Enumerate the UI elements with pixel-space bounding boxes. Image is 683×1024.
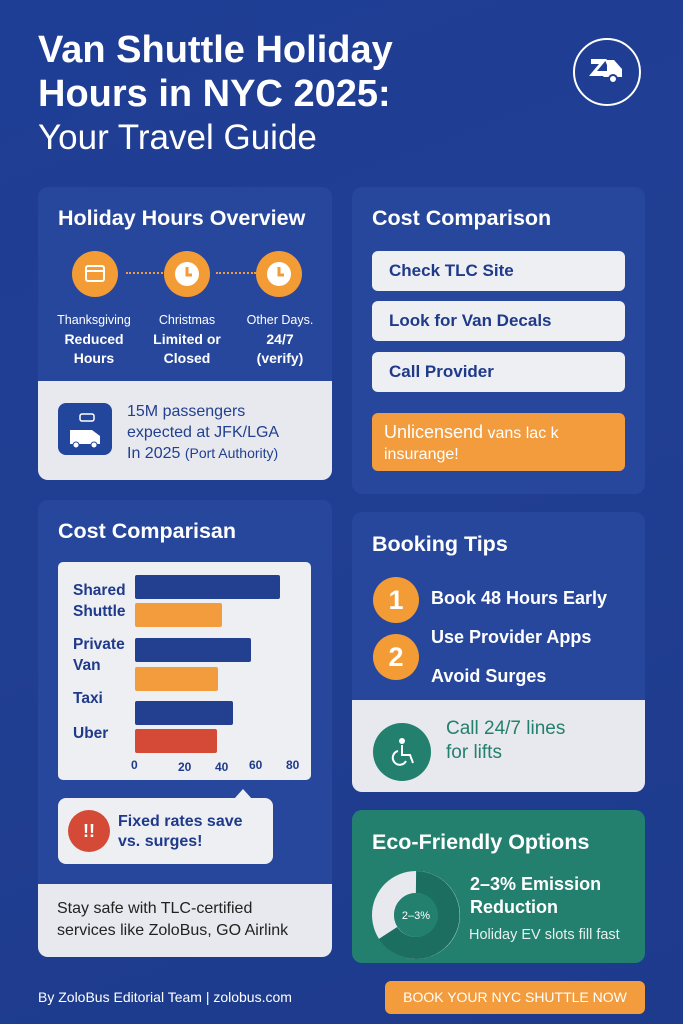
footer credit: By ZoloBus Editorial Team | zolobus.com: [38, 989, 292, 1005]
text: passengers: [127, 403, 279, 462]
bar chart: Private: [73, 636, 125, 653]
panel: cost comparison chart: [38, 500, 332, 957]
warning box: insurange!: [384, 446, 459, 463]
icon: van: [58, 403, 112, 455]
icon: logo: [573, 38, 641, 106]
panel: booking tips: [352, 512, 645, 792]
icon: number 2: [373, 634, 419, 680]
heading: Cost Comparisan: [58, 519, 236, 543]
callout: [58, 798, 273, 864]
callout: Fixed rates save: [118, 813, 243, 830]
stat text: 2–3% Emission: [470, 874, 601, 894]
label: thanksgiving: Hours: [74, 350, 114, 366]
label: other days: [247, 313, 313, 366]
panel: cost comparison checklist: [352, 187, 645, 494]
bar chart: Van: [73, 657, 101, 674]
bar chart: Taxi: [73, 690, 103, 707]
callout: vs. surges!: [118, 833, 202, 850]
button: book now: [385, 981, 645, 1014]
icon: number 1: [373, 577, 419, 623]
bar chart: 60: [249, 758, 262, 772]
bar chart: Shared: [73, 582, 126, 599]
donut chart: 2–3%: [402, 910, 430, 922]
stat text: [470, 874, 601, 917]
label: other days: (verify): [257, 350, 303, 366]
label: christmas: Closed: [164, 350, 210, 366]
heading: Eco-Friendly Options: [372, 830, 589, 854]
button: van decals: Look for Van Decals: [389, 311, 552, 330]
stat text: Reduction: [470, 897, 558, 917]
tips list: Avoid Surges: [431, 666, 546, 686]
label: other days: 24/7: [266, 331, 294, 347]
safety note: services like ZoloBus, GO Airlink: [57, 922, 288, 939]
button: check TLC: Check TLC Site: [389, 261, 514, 280]
title: [38, 29, 393, 157]
accessibility box: Call 24/7 lines: [446, 718, 565, 739]
label: thanksgiving: [57, 313, 131, 366]
bar chart: Shuttle: [73, 603, 126, 620]
bar chart: 0: [131, 758, 138, 772]
accessibility box: for lifts: [446, 742, 502, 763]
bar chart: [58, 562, 311, 780]
button: van decals: [372, 301, 625, 341]
icon: alert: !!: [83, 821, 95, 841]
button: call provider: [372, 352, 625, 392]
icon: clock 2: [256, 251, 302, 297]
text: passengers: In 2025 (Port Authority): [127, 445, 278, 462]
button: check TLC: [372, 251, 625, 291]
safety note: Stay safe with TLC-certified: [57, 900, 252, 917]
label: christmas: Limited or: [153, 331, 221, 347]
tips list: [431, 588, 607, 686]
donut chart: [372, 871, 460, 959]
bar chart: 80: [286, 758, 299, 772]
icon: clock: [164, 251, 210, 297]
tips list: Book 48 Hours Early: [431, 588, 607, 608]
label: thanksgiving: Reduced: [64, 331, 124, 347]
bar chart: Uber: [73, 725, 108, 742]
panel: eco-friendly: Holiday EV slots fill fast: [469, 927, 620, 943]
text: passengers: 15M passengers: [127, 403, 245, 420]
heading: Holiday Hours Overview: [58, 206, 305, 230]
panel: eco-friendly: [352, 810, 645, 963]
label: christmas: [153, 313, 221, 366]
icon: alert: [68, 810, 110, 852]
button: call provider: Call Provider: [389, 362, 494, 381]
title: Van Shuttle Holiday: [38, 29, 393, 71]
bar chart: 20: [178, 760, 191, 774]
button: book now: BOOK YOUR NYC SHUTTLE NOW: [403, 989, 627, 1005]
warning box: [372, 413, 625, 471]
label: thanksgiving: Thanksgiving: [57, 313, 131, 327]
panel: holiday hours overview: [38, 187, 332, 480]
tips list: Use Provider Apps: [431, 627, 591, 647]
text: passengers: expected at JFK/LGA: [127, 424, 279, 441]
heading: Cost Comparison: [372, 206, 551, 230]
icon: number 2: 2: [388, 642, 404, 672]
stat box: [38, 381, 332, 480]
icon: calendar: [72, 251, 118, 297]
accessibility box: [352, 700, 645, 792]
warning box: Unlicensend vans lac k: [384, 422, 559, 442]
bar chart: 40: [215, 760, 228, 774]
title: Your Travel Guide: [38, 118, 317, 157]
icon: number 1: 1: [388, 585, 404, 615]
icon: wheelchair: [373, 723, 431, 781]
label: christmas: Christmas: [159, 313, 215, 327]
label: other days: Other Days.: [247, 313, 313, 327]
safety note: [38, 884, 332, 957]
heading: Booking Tips: [372, 532, 508, 556]
title: Hours in NYC 2025:: [38, 73, 391, 115]
